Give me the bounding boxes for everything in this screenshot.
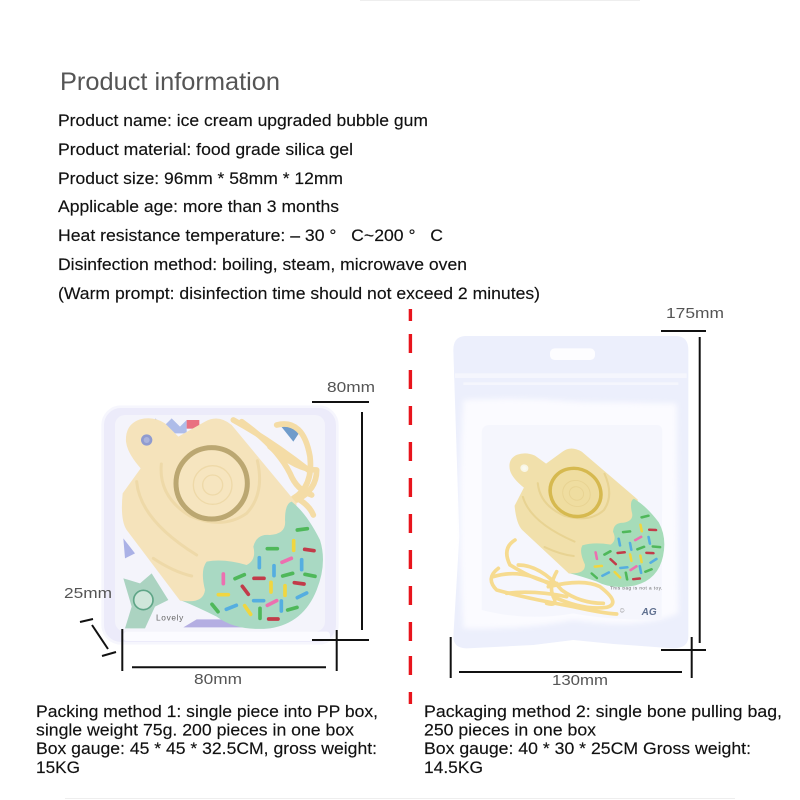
printed warning text: AG xyxy=(641,607,657,618)
dimension label: box width: 80mm xyxy=(194,671,242,688)
product specification text block: Heat resistance temperature: – 30 ° C~200 ° C xyxy=(58,226,443,245)
yellow cord xyxy=(491,540,617,614)
hang slot xyxy=(550,348,595,360)
printed warning text: This bag is not a toy. xyxy=(610,585,662,590)
red dashed divider xyxy=(409,309,412,704)
dimension label: box depth: 25mm xyxy=(64,585,112,602)
dimension label: box height: 80mm xyxy=(327,379,375,396)
zip seal xyxy=(455,373,687,385)
product specification text block: Product material: food grade silica gel xyxy=(58,140,353,159)
panel: bone pulling bag product photo xyxy=(453,336,688,648)
dimension lines: bag xyxy=(451,331,706,678)
teether xyxy=(122,418,323,629)
product specification text block: Applicable age: more than 3 months xyxy=(58,197,339,216)
box contents: coloured toys xyxy=(123,418,300,628)
top edge line xyxy=(360,0,640,1)
product specification text block: Disinfection method: boiling, steam, microwave oven xyxy=(58,255,467,274)
printed warning text: ☺ xyxy=(618,606,626,615)
yellow cord xyxy=(233,420,317,515)
packaging method 2 text: Box gauge: 40 * 30 * 25CM Gross weight: xyxy=(424,739,751,758)
packing method 1 text: Packing method 1: single piece into PP box, xyxy=(36,702,378,721)
dimension label: bag width: 130mm xyxy=(552,672,608,689)
packaging method 2 text: Packaging method 2: single bone pulling bag, xyxy=(424,702,782,721)
packaging method 2 text xyxy=(424,702,782,777)
teether xyxy=(504,441,673,597)
product specification text block xyxy=(58,111,540,303)
packaging method 2 text: 250 pieces in one box xyxy=(424,720,597,740)
dimension label: bag height: 175mm xyxy=(666,305,724,322)
bag body xyxy=(453,336,688,648)
printed warning text: Do not xyxy=(610,574,624,579)
printed warning text xyxy=(610,574,662,618)
product specification text block: Product name: ice cream upgraded bubble gum xyxy=(58,111,428,130)
panel: PP box product photo xyxy=(103,407,337,643)
packing method 1 text: 15KG xyxy=(36,758,80,777)
heading: Product information: Product information xyxy=(60,68,280,96)
dimension lines: box xyxy=(80,402,369,671)
box shell xyxy=(103,407,337,643)
packaging method 2 text: 14.5KG xyxy=(424,758,483,777)
box contents: coloured toys: Lovely xyxy=(156,612,184,622)
clear window xyxy=(482,425,662,620)
packing method 1 text: Box gauge: 45 * 45 * 32.5CM, gross weight: xyxy=(36,739,377,758)
product specification text block: Product size: 96mm * 58mm * 12mm xyxy=(58,169,343,188)
packing method 1 text: single weight 75g. 200 pieces in one box xyxy=(36,720,355,740)
bottom edge line xyxy=(65,798,735,799)
packing method 1 text xyxy=(36,702,378,777)
product specification text block: (Warm prompt: disinfection time should not exceed 2 minutes) xyxy=(58,284,540,303)
